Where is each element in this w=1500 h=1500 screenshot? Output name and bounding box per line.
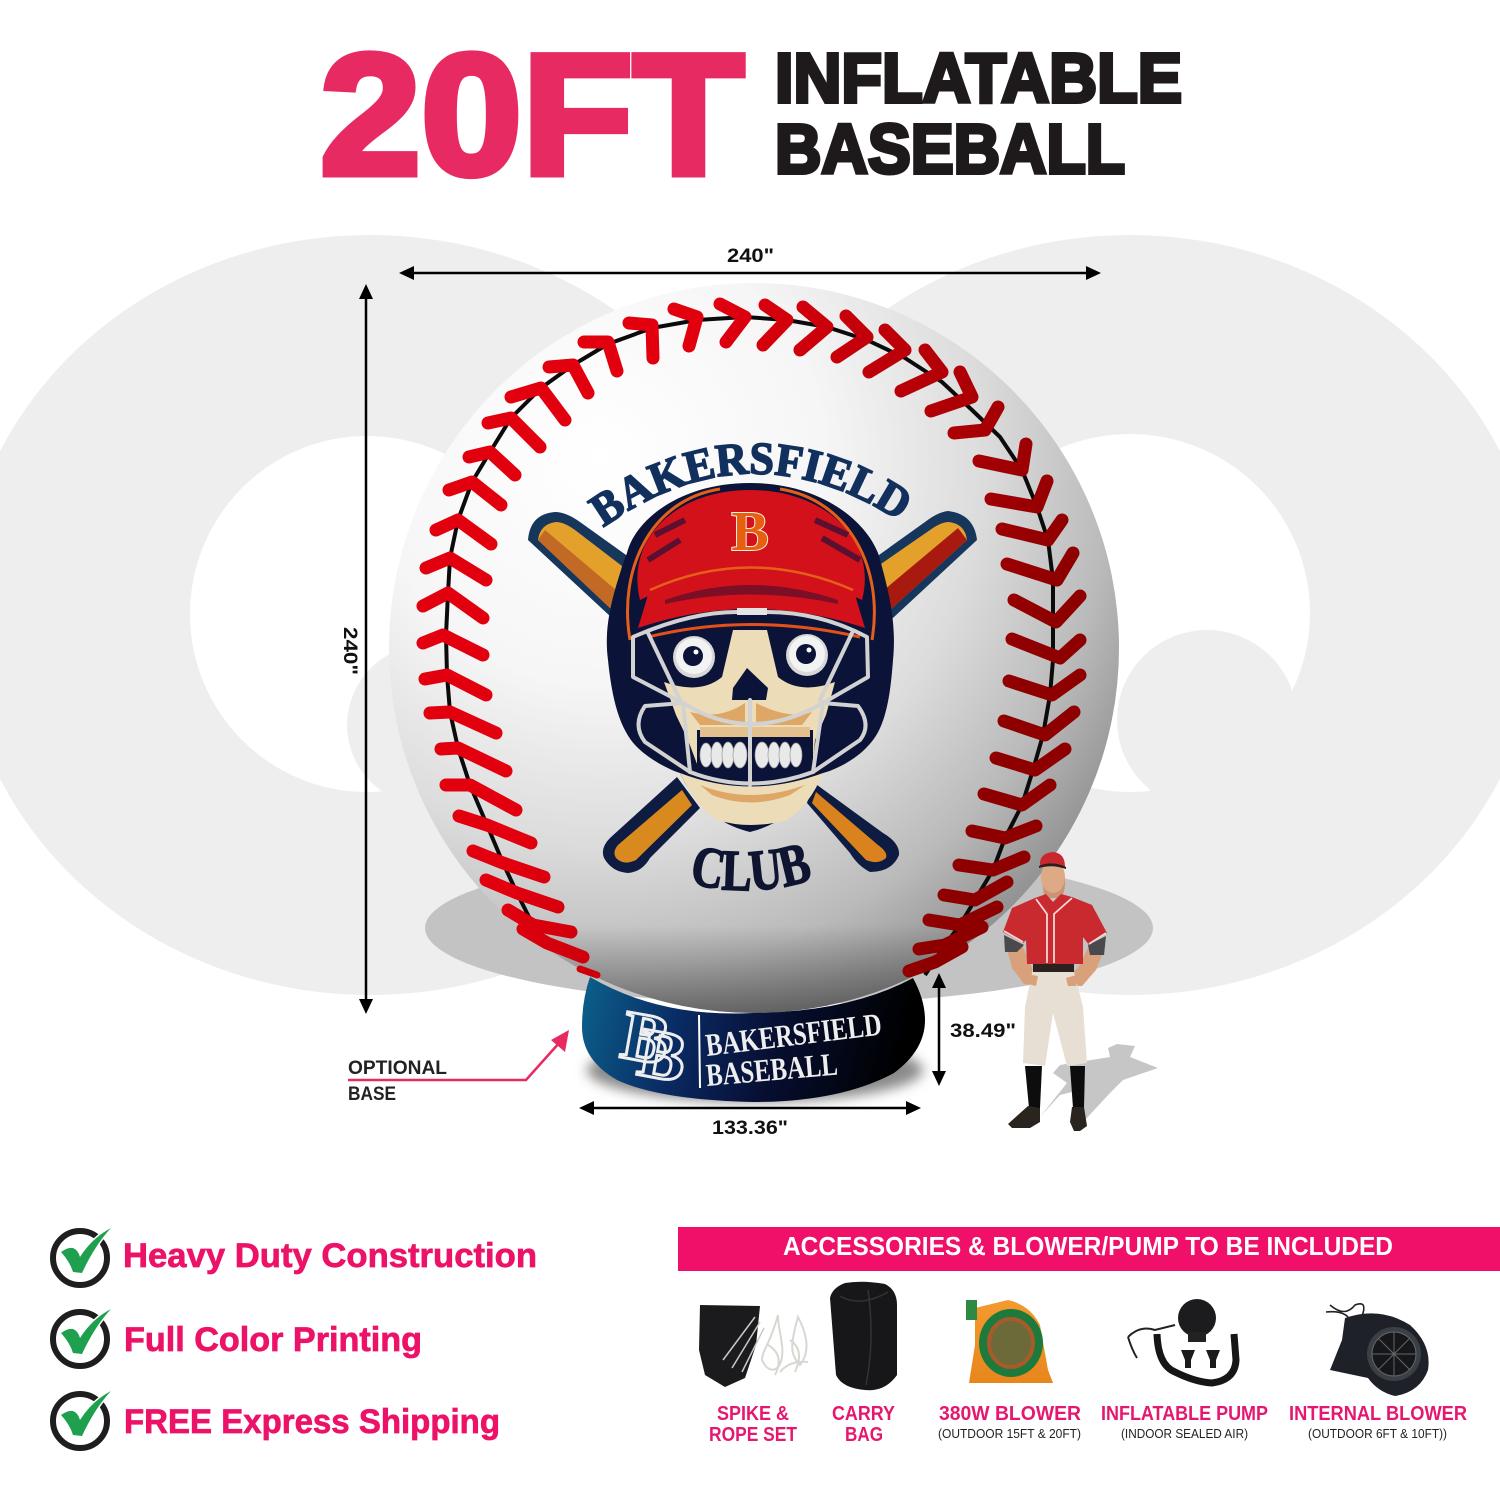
baseball seam line (446, 317, 1053, 975)
item: carry bag (830, 1282, 897, 1446)
base divider (699, 1015, 700, 1088)
accessories panel (678, 1227, 1500, 1446)
feature: full color printing (53, 1309, 422, 1366)
accessories banner: ACCESSORIES & BLOWER/PUMP TO BE INCLUDED (783, 1231, 1393, 1261)
background: gray double-ring swirl (0, 235, 1500, 995)
title: inflatable: INFLATABLE (775, 39, 1182, 117)
shoes (1008, 1106, 1087, 1131)
item: inflatable pump: (INDOOR SEALED AIR) (1121, 1426, 1248, 1441)
ground shadow of ball (425, 852, 1153, 1004)
head silhouette (607, 483, 894, 832)
dimension: base width (579, 1101, 921, 1139)
feature: free express shipping (53, 1391, 500, 1448)
crossed bats (528, 511, 977, 873)
hands (1026, 974, 1080, 986)
feature list (53, 1228, 537, 1448)
callout: optional base: BASE (348, 1084, 396, 1105)
socks (1025, 1066, 1085, 1108)
item: spike and rope set (699, 1305, 808, 1446)
face mask cage (633, 612, 868, 785)
feature: free express shipping: FREE Express Shipping (124, 1403, 500, 1441)
club curve guide (686, 878, 818, 890)
dimension: top width (399, 246, 1101, 280)
dimension: left height (339, 284, 373, 1014)
item: spike and rope set: ROPE SET (709, 1424, 797, 1446)
base monogram: B (633, 1014, 692, 1098)
dimension: top width: 240" (727, 246, 774, 267)
title: baseball: BASEBALL (775, 110, 1125, 188)
jersey (1003, 894, 1107, 964)
item: spike and rope set: SPIKE & (717, 1403, 789, 1425)
item: inflatable pump: INFLATABLE PUMP (1101, 1403, 1268, 1425)
helmet dome (637, 490, 865, 600)
dimension: base height: 38.49" (950, 1021, 1016, 1042)
inflatable base (582, 977, 925, 1102)
helmet letter B: B (731, 501, 769, 563)
item: internal blower: INTERNAL BLOWER (1289, 1403, 1467, 1425)
callout: optional base (348, 1030, 569, 1105)
item: internal blower (1289, 1304, 1467, 1441)
feature: heavy duty construction: Heavy Duty Construction (123, 1237, 537, 1275)
item: carry bag: CARRY (832, 1403, 896, 1425)
item: inflatable pump (1101, 1299, 1268, 1441)
item: 380W blower: (OUTDOOR 15FT & 20FT) (938, 1426, 1081, 1441)
eyes (673, 634, 828, 678)
team logo: Bakersfield club skull (528, 442, 977, 892)
check icon (53, 1309, 111, 1366)
check icon (53, 1228, 111, 1285)
feature: heavy duty construction (53, 1228, 537, 1285)
player shadow (1040, 1044, 1158, 1120)
undersleeves (1004, 935, 1106, 955)
inflatable baseball (380, 283, 1130, 1020)
title (320, 19, 1182, 211)
teeth (700, 742, 802, 768)
check icon (53, 1391, 111, 1448)
baseball player figure (1003, 852, 1158, 1131)
base text: Baseball: BASEBALL (704, 1046, 839, 1093)
item: 380W blower (938, 1300, 1082, 1441)
helmet brim (638, 568, 865, 628)
club label: CLUB (693, 845, 810, 892)
head and neck (1043, 878, 1065, 898)
item: internal blower: (OUTDOOR 6FT & 10FT)) (1308, 1426, 1447, 1441)
base text: Bakersfield: BAKERSFIELD (703, 1006, 884, 1063)
callout: optional base: OPTIONAL (348, 1058, 447, 1079)
red stitches (423, 304, 1080, 975)
feature: full color printing: Full Color Printing (124, 1321, 422, 1359)
dimension: left height: 240" (339, 627, 360, 675)
cap (1040, 852, 1065, 867)
title: 20FT: 20FT (320, 19, 744, 211)
belt (1033, 964, 1074, 972)
arms (1006, 945, 1106, 986)
item: 380W blower: 380W BLOWER (939, 1403, 1082, 1425)
text: Bakersfield: BAKERSFIELD (586, 442, 910, 528)
dimension: base width: 133.36" (712, 1118, 788, 1139)
dimension: base height (932, 973, 1016, 1086)
base monogram: B (616, 997, 675, 1081)
team name curve guide (600, 474, 905, 530)
item: carry bag: BAG (845, 1424, 883, 1446)
skull (664, 630, 835, 772)
trousers (1023, 968, 1087, 1066)
accessories banner (678, 1227, 1500, 1271)
base monogram (616, 997, 692, 1098)
